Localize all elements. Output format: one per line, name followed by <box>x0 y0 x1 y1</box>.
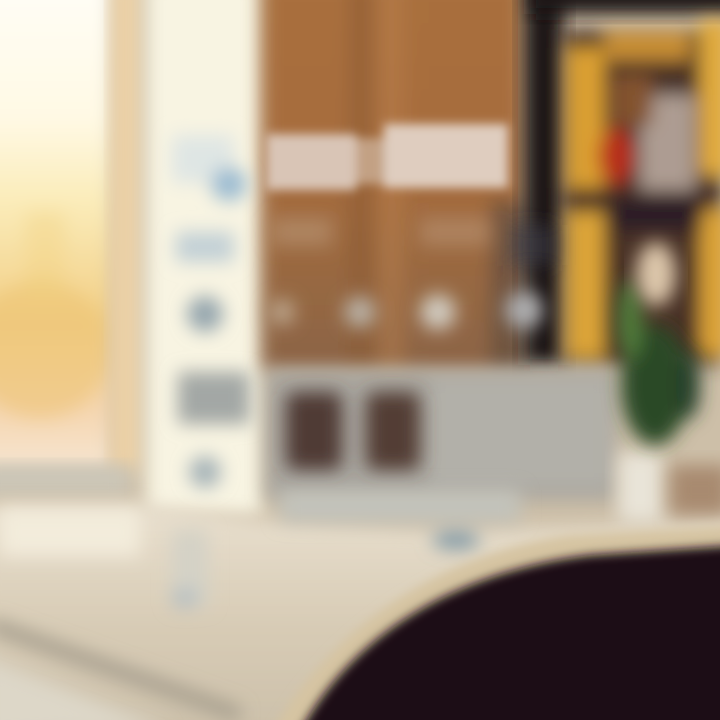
wooden wall panel <box>262 0 530 370</box>
blue-grey icons on cream strip <box>172 135 250 488</box>
small white blocks on wood panel <box>269 218 555 330</box>
pale cream wall strip <box>146 0 262 515</box>
open book edge shadow <box>0 625 240 715</box>
lighter book page lower left <box>0 655 170 720</box>
dark chair back <box>296 545 720 720</box>
table surface <box>0 505 720 720</box>
tan window frame <box>112 0 140 470</box>
pale flower on plant <box>636 242 676 306</box>
grey concrete backsplash <box>266 370 616 500</box>
window sill <box>0 466 130 494</box>
dark cabinet edge <box>524 0 564 365</box>
glass reflections on table <box>0 490 520 608</box>
dark top band <box>530 0 720 14</box>
white vase <box>618 452 662 522</box>
terracotta object beside vase <box>670 465 720 515</box>
white label band on wood panel <box>266 124 508 190</box>
green plant <box>617 280 700 445</box>
dark bottles on counter <box>286 392 420 470</box>
window with bright outdoor view <box>0 0 112 470</box>
yellow shelving unit <box>562 20 720 365</box>
chair back rim <box>268 525 720 720</box>
